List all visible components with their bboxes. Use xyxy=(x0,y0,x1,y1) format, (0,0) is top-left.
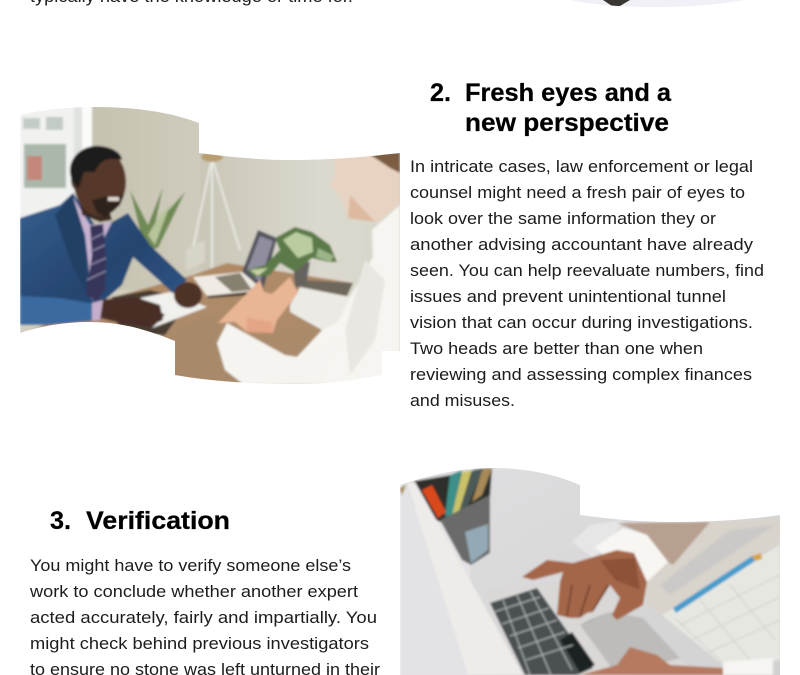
sleeve xyxy=(617,522,710,565)
photo: two men at a desk xyxy=(20,100,405,390)
heading: section 2 xyxy=(430,79,672,137)
desk plant xyxy=(293,262,310,287)
text block: section 3 body: You might have to verify someone else’s xyxy=(30,557,351,575)
back plant xyxy=(130,187,185,250)
text block: section 3 body: work to conclude whether another expert xyxy=(29,583,358,601)
lower hand xyxy=(580,647,723,675)
head xyxy=(80,204,113,224)
text block: section 2 body: issues and prevent unintentional tunnel xyxy=(410,288,726,306)
laptop lid xyxy=(407,482,523,675)
upper hand xyxy=(522,550,647,620)
text block: section 2 body: look over the same information they or xyxy=(410,210,717,228)
heading: section 2: 2. xyxy=(430,79,451,107)
heading: section 3: 3. xyxy=(50,507,71,535)
paper xyxy=(140,292,207,328)
laptop base xyxy=(483,583,700,675)
pencil holder xyxy=(412,468,494,523)
right man shirt xyxy=(297,205,400,384)
man jacket xyxy=(20,193,188,306)
man hands xyxy=(100,297,163,327)
keyboard xyxy=(490,588,593,675)
text block: section 3 body: acted accurately, fairly and impartially. You xyxy=(30,609,377,627)
heading: section 2: Fresh eyes and a xyxy=(465,79,672,107)
shirt and tie xyxy=(73,197,112,300)
right man head xyxy=(330,152,400,222)
text block: section 2 body: counsel might need a fresh pair of eyes to xyxy=(410,184,745,202)
text block: section 2 body xyxy=(410,158,764,410)
text block: section 3 body: might check behind previous investigators xyxy=(30,635,369,653)
text block: section 2 body: another advising accountant have already xyxy=(410,236,754,254)
photo fragment: previous section image xyxy=(570,0,745,7)
heading: section 3: Verification xyxy=(86,507,230,535)
text block: section 2 body: vision that can occur during investigations. xyxy=(410,314,753,332)
table xyxy=(20,263,353,384)
window xyxy=(20,108,76,219)
laptop xyxy=(242,230,277,290)
text block: section 2 body: and misuses. xyxy=(410,392,515,410)
papers xyxy=(574,521,623,557)
heading: section 2: new perspective xyxy=(465,109,669,137)
text block: section 2 body: seen. You can help reevaluate numbers, find xyxy=(410,262,764,280)
tripod lamp xyxy=(190,158,240,268)
text block: section 2 body: Two heads are better than one when xyxy=(410,340,703,358)
text block: section 2 body: reviewing and assessing complex finances xyxy=(410,366,752,384)
text block: section 3 body xyxy=(29,557,381,675)
photo: hands typing on laptop xyxy=(400,460,785,675)
text block: section 2 body: In intricate cases, law enforcement or legal xyxy=(410,158,753,176)
right man hands xyxy=(218,277,298,333)
pencil xyxy=(673,556,755,613)
